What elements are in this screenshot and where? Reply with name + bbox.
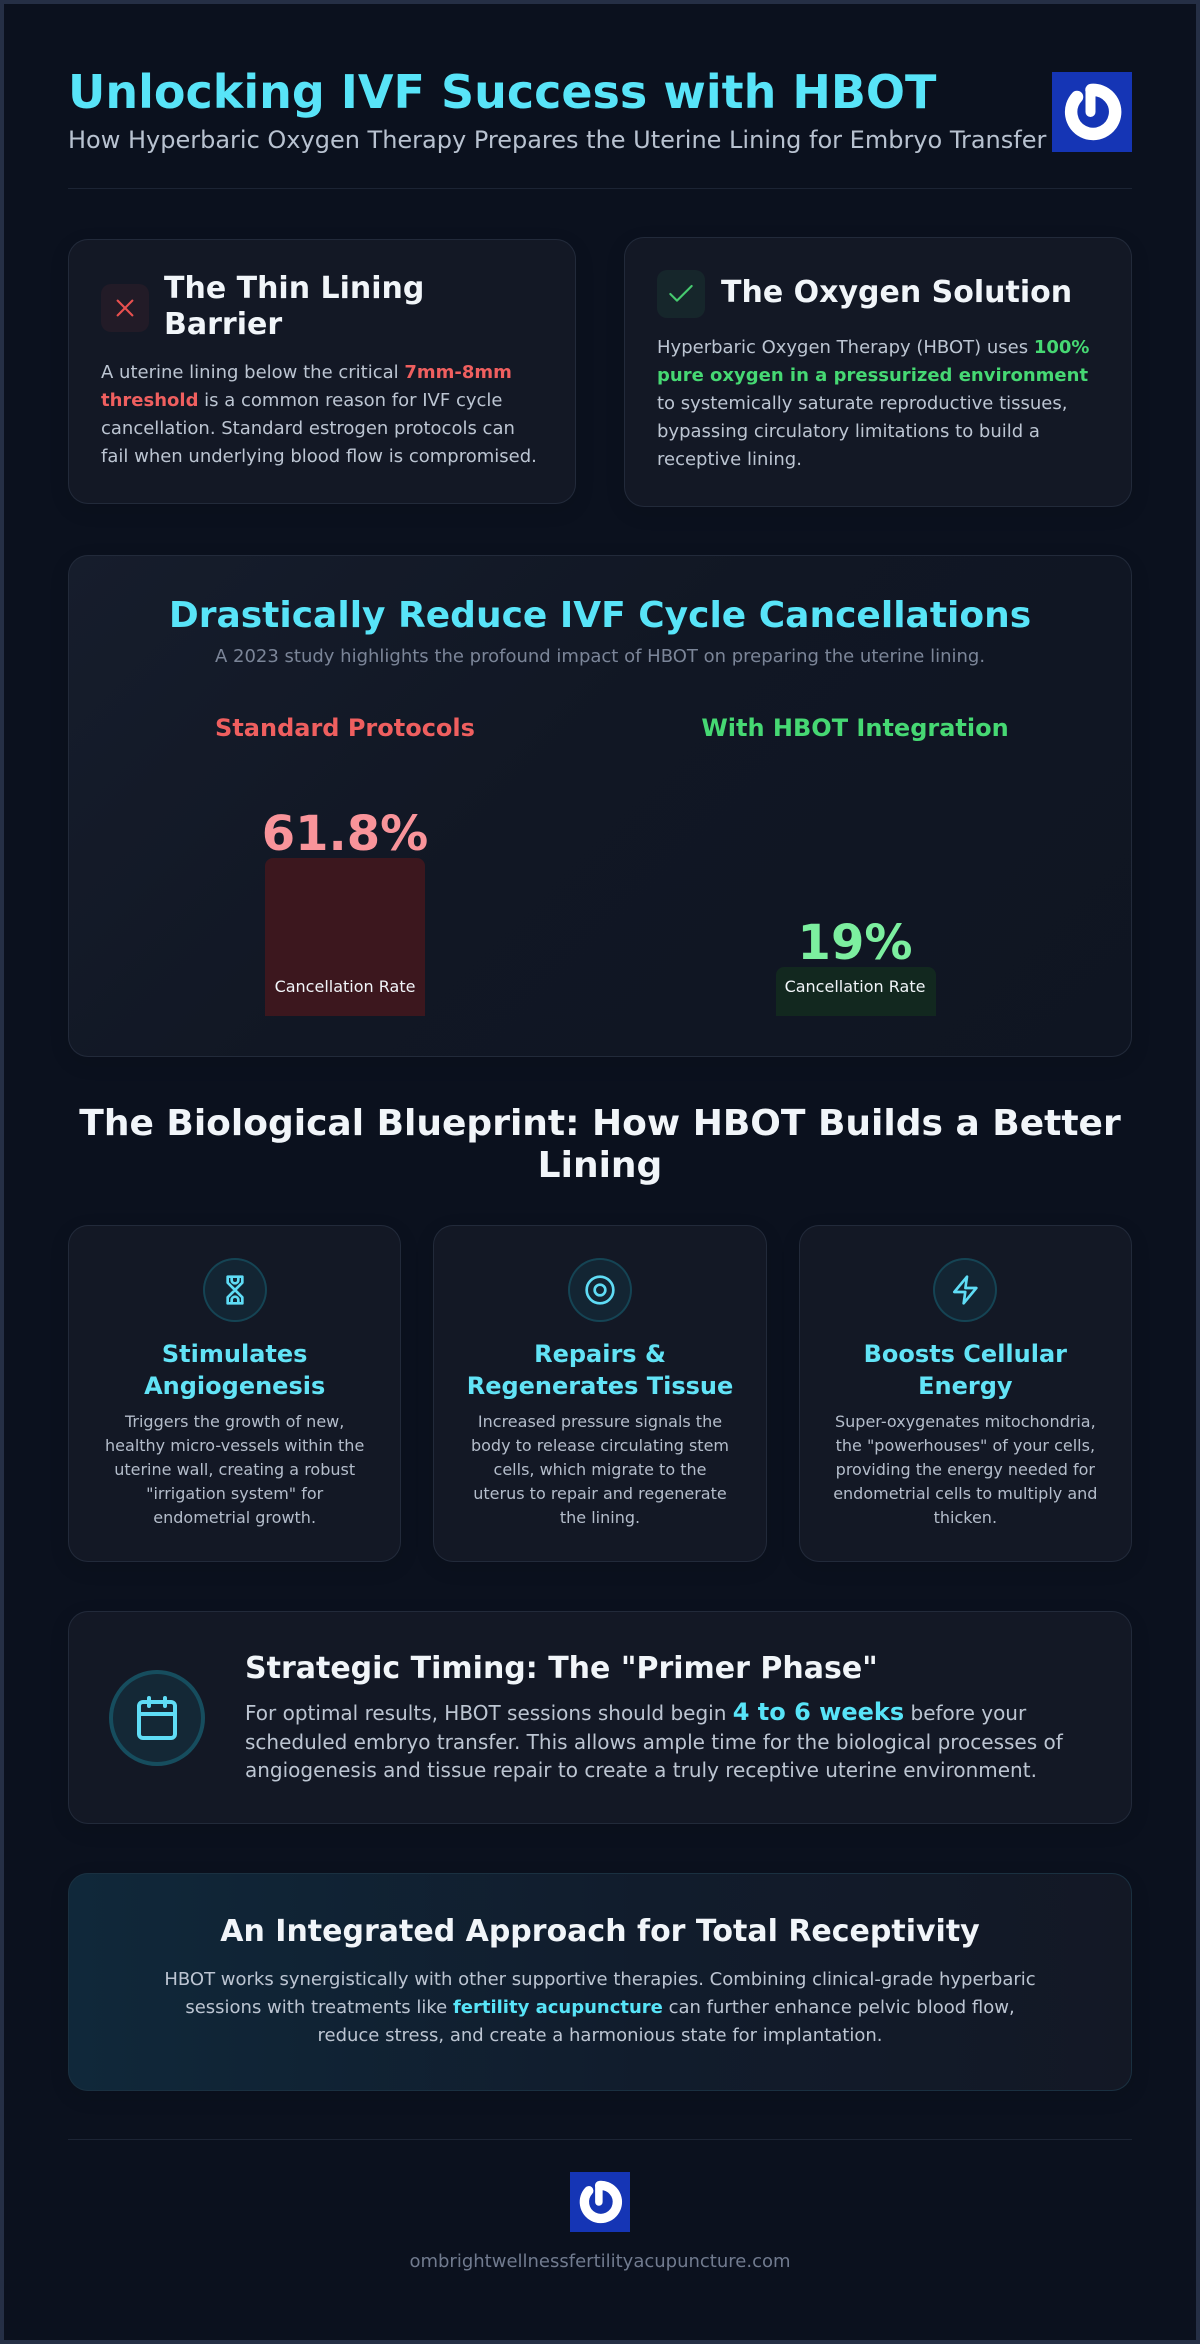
card title: Regenerates Tissue	[467, 1372, 733, 1400]
card text: body to release circulating stem	[471, 1436, 729, 1455]
panel: strategic timing	[68, 1611, 1132, 1824]
card title	[864, 1340, 1067, 1400]
body text: receptive lining.	[657, 449, 802, 470]
card title: Stimulates	[162, 1340, 307, 1368]
heading	[164, 271, 424, 342]
panel: cancellation rates chart	[68, 555, 1132, 1057]
card text: thicken.	[934, 1508, 997, 1527]
heading: The Oxygen Solution	[721, 275, 1072, 310]
icon: calendar	[109, 1670, 205, 1766]
icon: footer logo	[570, 2172, 630, 2232]
body text	[164, 1969, 1036, 2046]
card title: Angiogenesis	[144, 1372, 325, 1400]
column label: With HBOT Integration	[701, 714, 1009, 742]
heading: The Thin Lining	[164, 271, 424, 306]
card text: Increased pressure signals the	[478, 1412, 722, 1431]
card text: uterine wall, creating a robust	[114, 1460, 355, 1479]
body text: sessions with treatments like fertility acupuncture can further enhance pelvic blood flow,	[185, 1997, 1015, 2018]
body text: For optimal results, HBOT sessions should begin 4 to 6 weeks before your	[245, 1698, 1026, 1726]
card title: Repairs &	[534, 1340, 666, 1368]
body text: scheduled embryo transfer. This allows ample time for the biological processes of	[245, 1730, 1063, 1754]
value: 19%	[798, 915, 912, 971]
icon: brand logo	[1052, 72, 1132, 152]
body text: reduce stress, and create a harmonious state for implantation.	[318, 2025, 882, 2046]
heading: Drastically Reduce IVF Cycle Cancellations	[169, 595, 1031, 636]
body text: A uterine lining below the critical 7mm-8mm	[101, 362, 512, 383]
panel: stimulates angiogenesis	[68, 1225, 401, 1562]
bar	[265, 858, 425, 1016]
panel: the oxygen solution	[624, 237, 1132, 507]
card text: providing the energy needed for	[836, 1460, 1095, 1479]
icon: target	[568, 1258, 632, 1322]
section heading: biological blueprint: The Biological Blueprint: How HBOT Builds a Better	[79, 1103, 1121, 1144]
card text	[471, 1412, 729, 1527]
card text: Super-oxygenates mitochondria,	[835, 1412, 1096, 1431]
subheading: A 2023 study highlights the profound impact of HBOT on preparing the uterine lining.	[215, 646, 985, 667]
body text: bypassing circulatory limitations to build a	[657, 421, 1040, 442]
icon: green check	[657, 270, 705, 318]
body text: cancellation. Standard estrogen protocols can	[101, 418, 515, 439]
card text: endometrial cells to multiply and	[833, 1484, 1097, 1503]
card text	[833, 1412, 1097, 1527]
card title	[467, 1340, 733, 1400]
bar column: standard protocols	[215, 714, 475, 1016]
card text: endometrial growth.	[153, 1508, 316, 1527]
heading: Barrier	[164, 307, 282, 342]
body text: angiogenesis and tissue repair to create a truly receptive uterine environment.	[245, 1758, 1037, 1782]
icon: red x	[101, 284, 149, 332]
body text	[245, 1698, 1064, 1782]
section heading: biological blueprint	[79, 1103, 1121, 1186]
bar label: Cancellation Rate	[275, 977, 415, 996]
section heading: biological blueprint: Lining	[538, 1145, 662, 1186]
bar label: Cancellation Rate	[785, 977, 925, 996]
header	[68, 65, 1132, 154]
card title: Energy	[918, 1372, 1013, 1400]
card title: Boosts Cellular	[864, 1340, 1067, 1368]
card text	[105, 1412, 364, 1527]
card text: healthy micro-vessels within the	[105, 1436, 364, 1455]
website url: ombrightwellnessfertilityacupuncture.com	[409, 2251, 791, 2272]
card text: "irrigation system" for	[146, 1484, 323, 1503]
body text	[101, 362, 537, 467]
card text: the lining.	[560, 1508, 640, 1527]
card text: cells, which migrate to the	[494, 1460, 706, 1479]
body text: pure oxygen in a pressurized environment	[657, 365, 1088, 386]
column label: Standard Protocols	[215, 714, 475, 742]
heading: Strategic Timing: The "Primer Phase"	[245, 1651, 878, 1686]
subtitle: How Hyperbaric Oxygen Therapy Prepares the Uterine Lining for Embryo Transfer	[68, 126, 1046, 154]
bar column: with HBOT	[701, 714, 1009, 1016]
body text: to systemically saturate reproductive tissues,	[657, 393, 1067, 414]
body text	[657, 337, 1089, 470]
value: 61.8%	[262, 806, 428, 862]
title: Unlocking IVF Success with HBOT	[68, 65, 936, 119]
heading: An Integrated Approach for Total Receptivity	[220, 1914, 980, 1949]
body text: threshold is a common reason for IVF cycle	[101, 390, 502, 411]
icon: bolt	[933, 1258, 997, 1322]
body text: fail when underlying blood flow is compromised.	[101, 446, 537, 467]
panel: repairs and regenerates	[433, 1225, 767, 1562]
body text: Hyperbaric Oxygen Therapy (HBOT) uses 100%	[657, 337, 1089, 358]
body text: HBOT works synergistically with other supportive therapies. Combining clinical-grade hyperbaric	[164, 1969, 1036, 1990]
card text: Triggers the growth of new,	[125, 1412, 344, 1431]
footer	[409, 2172, 791, 2272]
card title	[144, 1340, 325, 1400]
panel: boosts cellular energy	[799, 1225, 1132, 1562]
panel: the thin lining barrier	[68, 239, 576, 504]
bar	[776, 967, 936, 1016]
panel: integrated approach	[68, 1873, 1132, 2091]
icon: hourglass	[203, 1258, 267, 1322]
card text: uterus to repair and regenerate	[473, 1484, 727, 1503]
card text: the "powerhouses" of your cells,	[836, 1436, 1095, 1455]
